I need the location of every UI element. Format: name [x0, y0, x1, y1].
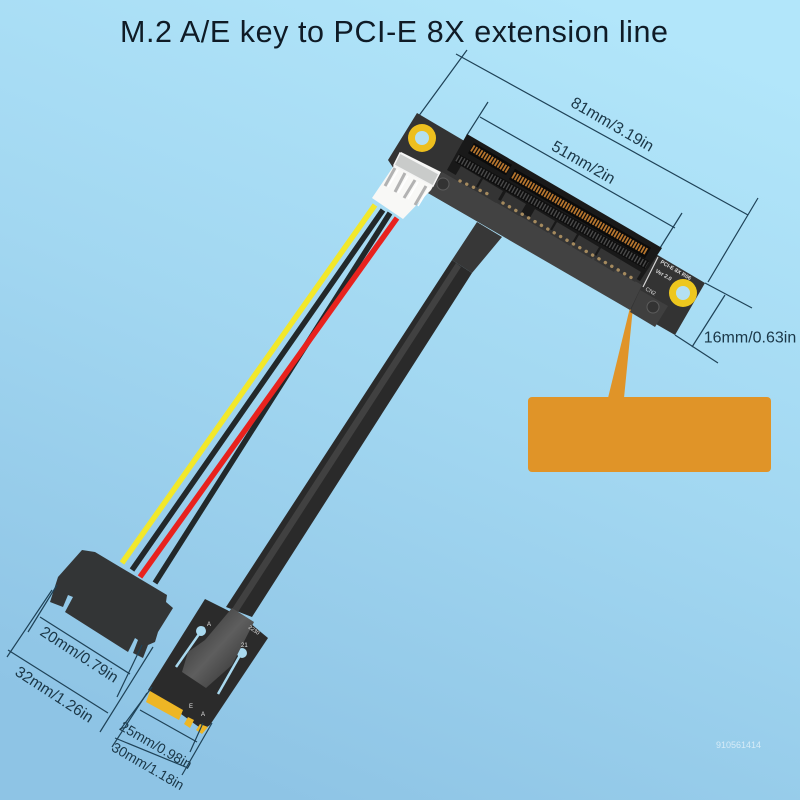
dimension: 32mm SATA plug — [7, 590, 153, 732]
board labels: A — [207, 622, 211, 628]
board labels: A — [201, 712, 205, 718]
dimension: 81mm board length: 81mm/3.19in — [568, 95, 656, 155]
silkscreen text — [644, 260, 692, 297]
dimension: 32mm SATA plug: 32mm/1.26in — [12, 663, 96, 727]
PCI-E 8X slot connector — [447, 134, 662, 282]
left mounting slot — [176, 627, 204, 667]
callout: orange blank label — [528, 287, 771, 472]
mounting hole right — [669, 279, 697, 307]
dimension: 20mm SATA connector: 20mm/0.79in — [37, 623, 121, 687]
right mounting slot — [218, 650, 243, 694]
SATA power wires — [122, 205, 397, 583]
board labels: 21 — [241, 643, 248, 649]
watermark: 910561414 — [716, 740, 761, 750]
silkscreen text: CN2 — [644, 287, 657, 297]
PCI-E adapter board — [388, 113, 705, 335]
upper contact row — [471, 148, 648, 253]
dimension: 16mm board width — [675, 283, 796, 363]
silkscreen text: PCI-E 8X R06 — [659, 260, 692, 282]
dimension: 30mm M.2 board: 30mm/1.18in — [109, 739, 187, 793]
dimension: 51mm slot length — [467, 102, 682, 248]
screws — [437, 178, 659, 313]
flat ribbon cable — [226, 222, 502, 617]
yellow wire — [122, 205, 375, 563]
M.2 A/E key board — [146, 599, 268, 734]
red wire — [140, 218, 397, 577]
housing tabs — [454, 166, 641, 282]
dimension: 20mm SATA connector — [28, 585, 142, 697]
solder points — [460, 181, 632, 278]
dimension: 25mm M.2 key: 25mm/0.98in — [117, 718, 195, 772]
lower contact row — [457, 158, 647, 265]
silkscreen text: Ver 2.0 — [654, 269, 672, 283]
board labels: 2230 — [247, 625, 260, 637]
dimension: 25mm M.2 key — [117, 687, 203, 772]
title: M.2 A/E key to PCI-E 8X extension line — [120, 15, 668, 49]
4-pin white connector — [372, 152, 441, 219]
dimension: 81mm board length — [418, 50, 758, 282]
gold fingers — [146, 691, 208, 734]
black wire — [132, 210, 383, 570]
board labels: E — [189, 704, 193, 710]
dimension: 51mm slot length: 51mm/2in — [548, 138, 618, 188]
cable end on board — [182, 608, 254, 688]
board labels — [189, 622, 260, 718]
dimension: 16mm board width: 16mm/0.63in — [704, 330, 796, 346]
mounting hole top left — [408, 124, 436, 152]
lower board strip — [428, 172, 642, 310]
black wire lower — [155, 213, 390, 583]
dimension: 30mm M.2 board — [109, 693, 212, 793]
SATA power plug — [50, 550, 173, 658]
